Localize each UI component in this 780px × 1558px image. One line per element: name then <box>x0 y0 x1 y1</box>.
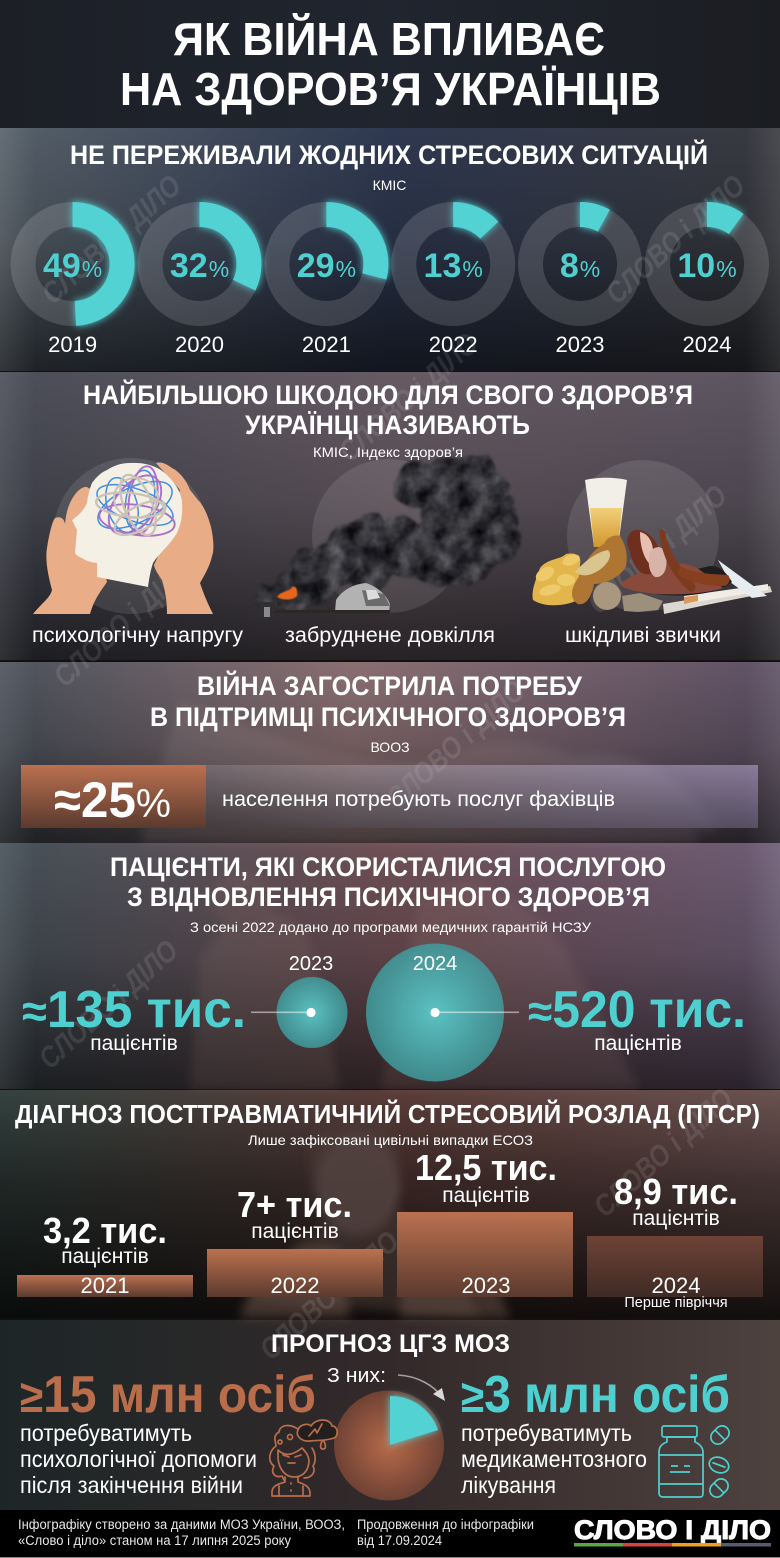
title: НА ЗДОРОВ’Я УКРАЇНЦІВ <box>120 63 661 115</box>
icon: stressed person with storm cloud <box>270 1420 337 1496</box>
title <box>120 13 661 115</box>
text: medication: потребуватимуть <box>461 1420 632 1446</box>
heading: НЕ ПЕРЕЖИВАЛИ ЖОДНИХ СТРЕСОВИХ СИТУАЦІЙ <box>70 139 708 170</box>
value 2023: ≈135 тис. <box>22 981 246 1039</box>
text: medication: медикаментозного <box>461 1446 647 1472</box>
credits: Інфографіку створено за даними МОЗ України, ВООЗ, <box>18 1517 345 1532</box>
credits: «Слово і діло» станом на 17 липня 2025 року <box>18 1533 291 1548</box>
text: psychological help: після закінчення війни <box>20 1472 243 1498</box>
value 2024: пацієнтів <box>594 1032 682 1055</box>
bar 2023 <box>397 1147 573 1298</box>
bar 2021: 2021 <box>81 1273 129 1298</box>
donut 2024 <box>658 214 756 357</box>
bubble 2023 <box>251 953 348 1048</box>
arrow <box>398 1375 445 1401</box>
panel: patients who used mental health recovery service <box>22 852 746 1082</box>
image: beer, fatty food and cigarettes <box>533 478 772 614</box>
footer <box>0 1510 780 1558</box>
bar 2023: 12,5 тис. <box>415 1147 557 1188</box>
bar 2023: пацієнтів <box>442 1184 530 1207</box>
title: ЯК ВІЙНА ВПЛИВАЄ <box>173 13 605 65</box>
related infographic note <box>357 1517 534 1548</box>
donut 2024: 2024 <box>683 332 731 357</box>
bar 2024: 8,9 тис. <box>614 1171 738 1212</box>
bar 2023: 2023 <box>462 1273 510 1298</box>
value 2023: пацієнтів <box>90 1032 178 1055</box>
stat bar <box>21 765 758 828</box>
donut 2020: 2020 <box>175 332 224 357</box>
donut 2022: 2022 <box>429 332 478 357</box>
donut 2023: 8% <box>560 247 600 285</box>
image: hands holding head with tangled thoughts <box>33 462 213 614</box>
bar 2024: 2024 <box>652 1273 700 1298</box>
stat bar: населення потребують послуг фахівців <box>222 788 615 811</box>
logo: СЛОВО І ДІЛО <box>574 1515 771 1545</box>
bar 2022: 7+ тис. <box>237 1184 352 1225</box>
heading: ПРОГНОЗ ЦГЗ МОЗ <box>271 1330 510 1358</box>
bubble 2024 <box>366 944 519 1082</box>
bar 2021: 3,2 тис. <box>43 1210 167 1251</box>
heading <box>110 852 666 912</box>
bar 2024: Перше півріччя <box>624 1295 728 1311</box>
panel: PTSD diagnosis <box>15 1099 763 1311</box>
pie chart <box>334 1390 444 1500</box>
donut 2023: 2023 <box>556 332 604 357</box>
donut 2022: 13% <box>424 247 483 285</box>
heading <box>150 670 626 732</box>
donut 2021: 2021 <box>302 332 351 357</box>
donut 2019: 2019 <box>48 332 97 357</box>
source: КМІС <box>373 177 406 193</box>
image: black smoke from burning tank <box>255 453 522 617</box>
heading: ВІЙНА ЗАГОСТРИЛА ПОТРЕБУ <box>197 670 583 701</box>
donut 2021 <box>277 214 376 357</box>
bubble 2023: 2023 <box>289 953 333 975</box>
bar 2024: пацієнтів <box>632 1207 720 1230</box>
panel: no stress situations <box>23 139 757 357</box>
backdrop circles <box>53 458 719 614</box>
donut 2019 <box>23 214 122 357</box>
text: psychological help <box>20 1420 257 1498</box>
note: З осені 2022 додано до програми медичних гарантій НСЗУ <box>190 919 591 935</box>
text: psychological help: психологічної допомоги <box>20 1446 257 1472</box>
related infographic note: Продовження до інфографіки <box>357 1517 534 1532</box>
bubble 2024: 2024 <box>413 953 457 975</box>
bar 2021: пацієнтів <box>61 1245 149 1268</box>
background photo: embracing people <box>140 700 720 1089</box>
watermarks <box>33 169 752 1367</box>
note: Лише зафіксовані цивільні випадки ЕСОЗ <box>248 1132 533 1148</box>
value 2024: ≈520 тис. <box>528 981 746 1039</box>
donut 2019: 49% <box>43 247 102 285</box>
text: psychological help: потребуватимуть <box>20 1420 192 1446</box>
icon: pill bottle with pills <box>659 1423 732 1500</box>
value: 3 million: ≥3 млн осіб <box>461 1366 730 1424</box>
stat bar: ≈25% <box>54 772 171 828</box>
heading: НАЙБІЛЬШОЮ ШКОДОЮ ДЛЯ СВОГО ЗДОРОВ’Я <box>83 379 693 410</box>
donut 2021: 29% <box>297 247 356 285</box>
caption: bad habits: шкідливі звички <box>565 624 721 647</box>
background photo: man holding his head <box>240 1120 510 1318</box>
credits <box>18 1517 345 1548</box>
bar 2022: пацієнтів <box>251 1220 339 1243</box>
panel: war intensified need for mental health support <box>21 670 758 828</box>
source: ВООЗ <box>370 739 410 755</box>
label: of them: З них: <box>327 1365 386 1387</box>
text: medication: лікування <box>461 1472 556 1498</box>
caption: psychological strain: психологічну напругу <box>32 624 244 647</box>
heading: З ВІДНОВЛЕННЯ ПСИХІЧНОГО ЗДОРОВ’Я <box>127 882 650 912</box>
bar 2021 <box>17 1210 193 1298</box>
bar 2022: 2022 <box>271 1273 319 1298</box>
panel: greatest harm to health <box>32 379 772 647</box>
donut 2022 <box>404 214 503 357</box>
source: КМІС, Індекс здоров’я <box>313 445 463 460</box>
heading: УКРАЇНЦІ НАЗИВАЮТЬ <box>245 410 530 440</box>
donut 2020: 32% <box>170 247 229 285</box>
bar 2022 <box>207 1184 383 1298</box>
donut 2023 <box>530 214 630 357</box>
panel: forecast <box>20 1330 732 1500</box>
value: 15 million: ≥15 млн осіб <box>20 1366 316 1424</box>
related infographic note: від 17.09.2024 <box>357 1533 442 1548</box>
caption: polluted environment: забруднене довкілля <box>285 624 495 647</box>
heading: В ПІДТРИМЦІ ПСИХІЧНОГО ЗДОРОВ’Я <box>150 702 626 732</box>
text: medication <box>461 1420 647 1498</box>
donut 2024: 10% <box>677 247 737 285</box>
heading <box>83 379 693 440</box>
donut 2020 <box>150 214 249 357</box>
bar 2024 <box>587 1171 763 1311</box>
heading: ПАЦІЄНТИ, ЯКІ СКОРИСТАЛИСЯ ПОСЛУГОЮ <box>110 852 666 882</box>
